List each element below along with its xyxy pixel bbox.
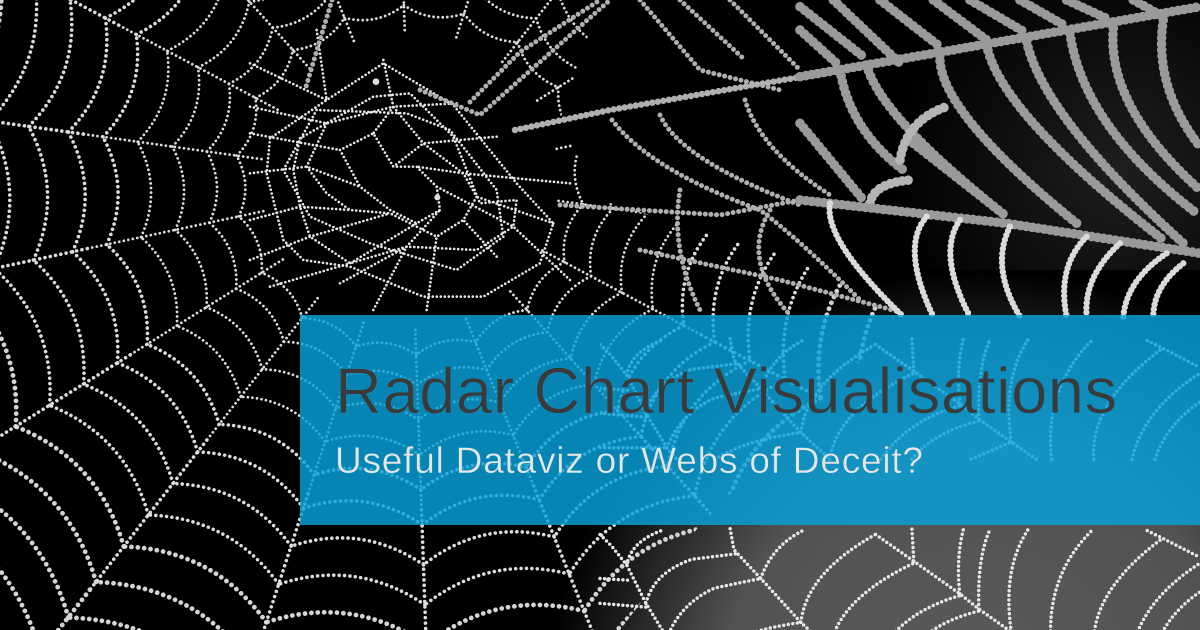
dense web centre: [250, 30, 570, 310]
web strands leading to upper right: [305, 0, 900, 315]
subtitle: Useful Dataviz or Webs of Deceit?: [335, 440, 923, 481]
thick web strands upper right: [800, 0, 1200, 317]
panel: title banner: [300, 315, 1200, 525]
lower right web scallops: [600, 529, 1200, 630]
web scallops behind banner: [600, 339, 1200, 459]
title: Radar Chart Visualisations: [335, 354, 1117, 427]
